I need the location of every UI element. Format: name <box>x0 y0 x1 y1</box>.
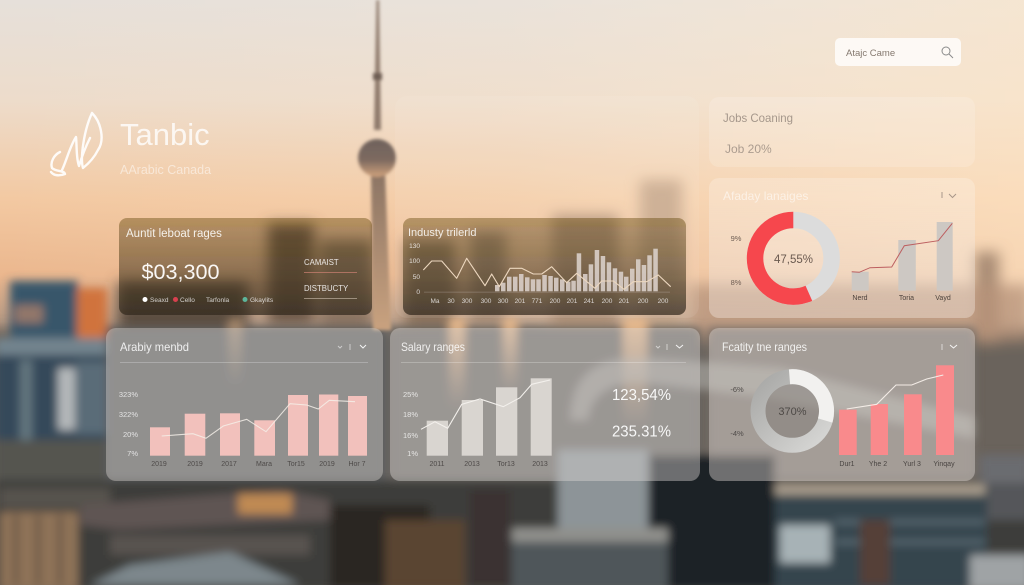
bars <box>427 378 552 456</box>
bar and line chart <box>852 222 953 302</box>
search box: Atajc Came <box>846 48 895 59</box>
x axis labels: 2017 <box>221 461 237 468</box>
faint panel behind industry trend <box>395 96 699 318</box>
panel: average salary: Auntit leboat rages <box>126 228 222 240</box>
panel: salary ranges: Salary ranges <box>401 340 465 354</box>
icon: logo mark <box>51 113 102 175</box>
CN tower <box>358 0 396 330</box>
logo and brand block <box>51 113 211 177</box>
x axis labels: 2013 <box>532 461 548 468</box>
y axis labels <box>403 390 418 458</box>
bar and line chart: Vayd <box>935 295 951 302</box>
x axis labels: 2019 <box>187 461 203 468</box>
x axis labels: Yinqay <box>933 461 955 468</box>
big number: $03,300 <box>142 259 220 284</box>
panel: donut and bars ranges: Afaday lanaiges <box>723 189 808 203</box>
x axis labels: 2011 <box>429 461 445 468</box>
trend line <box>847 375 943 409</box>
legend: Gkaylits <box>250 297 274 304</box>
x axis labels <box>839 461 955 468</box>
panel controls <box>656 344 683 350</box>
search box <box>835 38 961 66</box>
legend: Cello <box>180 297 195 304</box>
side labels <box>304 258 357 299</box>
panel: salary ranges <box>390 328 700 481</box>
donut chart <box>730 377 827 445</box>
panel: industry trend: Industy trilerld <box>408 227 476 239</box>
y axis labels: 323% <box>119 390 138 399</box>
x axis labels: Dur1 <box>839 461 855 468</box>
stat values <box>612 387 671 440</box>
x axis labels: Ma <box>430 298 440 305</box>
donut chart <box>731 220 832 297</box>
title: Tanbic <box>120 117 210 152</box>
bars <box>839 365 954 455</box>
side labels: CAMAIST <box>304 258 339 267</box>
panel: arabiy menbd <box>106 328 383 481</box>
x axis labels: 2019 <box>319 461 335 468</box>
panel controls <box>338 344 366 350</box>
donut chart: -4% <box>730 429 744 438</box>
x axis labels <box>151 461 366 468</box>
panel controls <box>942 192 956 198</box>
axis labels: 130 <box>409 243 420 250</box>
trend line <box>421 380 550 429</box>
icon: magnifier <box>942 47 953 58</box>
x axis labels: 201 <box>619 298 630 305</box>
y axis labels: 16% <box>403 431 418 440</box>
x axis labels: Hor 7 <box>348 461 366 468</box>
legend: Tarfonla <box>206 297 230 304</box>
x axis labels: 200 <box>602 298 613 305</box>
axis labels: 0 <box>416 289 420 296</box>
axis labels: 50 <box>413 274 420 281</box>
panel: arabiy menbd: Arabiy menbd <box>120 340 189 354</box>
panel: jobs coaning: Jobs Coaning <box>723 111 793 125</box>
donut chart: 8% <box>731 278 742 287</box>
panel: fcatity ranges <box>709 328 975 481</box>
x axis labels: 200 <box>550 298 561 305</box>
x axis labels: 300 <box>498 298 509 305</box>
y axis labels: 7% <box>127 449 138 458</box>
x axis labels: Yhe 2 <box>869 461 887 468</box>
x axis labels: 241 <box>584 298 595 305</box>
x axis labels: 30 <box>447 298 455 305</box>
axis labels <box>409 243 420 296</box>
donut chart: 47,55% <box>774 254 813 266</box>
y axis labels: 322% <box>119 410 138 419</box>
x axis labels <box>430 298 669 305</box>
x axis labels: 200 <box>658 298 669 305</box>
y axis labels: 25% <box>403 390 418 399</box>
x axis labels: Tor13 <box>497 461 515 468</box>
side labels: DISTBUCTY <box>304 284 349 293</box>
y axis labels: 20% <box>123 430 138 439</box>
trend line <box>423 258 671 289</box>
panel: average salary <box>119 218 372 315</box>
donut chart: 9% <box>731 234 742 243</box>
x axis labels: 2013 <box>464 461 480 468</box>
legend: Seaxd <box>150 297 169 304</box>
x axis labels: 300 <box>481 298 492 305</box>
x axis labels: 300 <box>462 298 473 305</box>
panel: jobs coaning <box>709 97 975 167</box>
panel: fcatity ranges: Fcatity tne ranges <box>722 340 807 354</box>
panel: industry trend <box>403 218 686 315</box>
panel controls <box>942 344 957 350</box>
stat values: 123,54% <box>612 387 671 404</box>
x axis labels <box>429 461 548 468</box>
x axis labels: 2019 <box>151 461 167 468</box>
panel: jobs coaning: Job 20% <box>725 142 772 156</box>
y axis labels: 18% <box>403 410 418 419</box>
bars <box>495 249 658 291</box>
x axis labels: 201 <box>567 298 578 305</box>
subtitle: AArabic Canada <box>120 163 211 177</box>
x axis labels: 771 <box>532 298 543 305</box>
panel: donut and bars ranges <box>709 178 975 318</box>
x axis labels: 201 <box>515 298 526 305</box>
donut chart: 370% <box>778 406 807 418</box>
y axis labels: 1% <box>407 449 418 458</box>
bar and line chart: Nerd <box>852 295 868 302</box>
legend <box>142 297 274 304</box>
y axis labels <box>119 390 138 458</box>
bars <box>150 394 367 456</box>
donut chart: -6% <box>730 385 744 394</box>
trend line <box>162 400 355 438</box>
stat values: 235.31% <box>612 424 671 440</box>
x axis labels: 200 <box>638 298 649 305</box>
bar and line chart: Toria <box>899 295 914 302</box>
x axis labels: Tor15 <box>287 461 305 468</box>
x axis labels: Yurl 3 <box>903 461 921 468</box>
axis labels: 100 <box>409 258 420 265</box>
x axis labels: Mara <box>256 461 272 468</box>
